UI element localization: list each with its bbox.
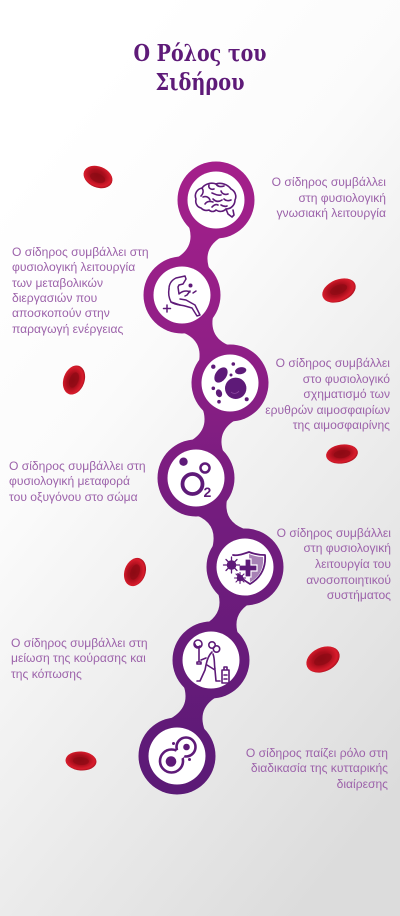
- text: fatigue: Ο σίδηρος συμβάλλει στη: [11, 636, 148, 650]
- text: red blood cells: [265, 356, 390, 432]
- icon: brain: [195, 183, 236, 217]
- text: oxygen transport: Ο σίδηρος συμβάλλει στη: [9, 459, 146, 473]
- text: energy metabolism: των μεταβολικών: [12, 276, 103, 290]
- red blood cell 5: [120, 555, 150, 589]
- text: immune system: λειτουργία του: [315, 557, 391, 571]
- text: immune system: στη φυσιολογική: [303, 541, 391, 555]
- text: energy metabolism: διεργασιών που: [12, 291, 98, 305]
- text: energy metabolism: φυσιολογική λειτουργία: [12, 260, 135, 274]
- text: immune system: Ο σίδηρος συμβάλλει: [277, 526, 391, 540]
- icon: blood cells: [211, 362, 249, 404]
- icon: oxygen O2: [179, 458, 212, 500]
- text: cell division: διαίρεσης: [337, 777, 388, 791]
- icon: immune shield: [224, 552, 265, 584]
- text: oxygen transport: φυσιολογική μεταφορά: [9, 474, 130, 488]
- text: energy metabolism: παραγωγή ενέργειας: [12, 322, 123, 336]
- text: cell division: Ο σίδηρος παίζει ρόλο στη: [246, 746, 388, 760]
- text: oxygen transport: [9, 459, 146, 504]
- text: cognitive function: [272, 175, 386, 220]
- text: energy metabolism: Ο σίδηρος συμβάλλει στη: [12, 245, 149, 259]
- title: Σιδήρου: [156, 69, 245, 96]
- red blood cell 3: [59, 362, 89, 398]
- title: [134, 40, 267, 96]
- text: cognitive function: Ο σίδηρος συμβάλλει: [272, 175, 386, 189]
- icon: cell division: [160, 738, 196, 772]
- icon: flexed arm: [164, 276, 200, 316]
- text: immune system: ανοσοποιητικού: [306, 573, 391, 587]
- text: fatigue: [11, 636, 148, 681]
- text: cell division: διαδικασία της κυτταρικής: [251, 761, 388, 775]
- text: red blood cells: Ο σίδηρος συμβάλλει: [276, 356, 390, 370]
- text: cognitive function: γνωσιακή λειτουργία: [276, 206, 386, 220]
- text: energy metabolism: αποσκοπούν στην: [12, 306, 110, 320]
- text: red blood cells: ερυθρών αιμοσφαιρίων: [265, 403, 390, 417]
- text: cognitive function: στη φυσιολογική: [298, 191, 386, 205]
- text: cell division: [246, 746, 388, 791]
- text: immune system: [277, 526, 391, 602]
- text: oxygen transport: του οξυγόνου στο σώμα: [9, 490, 138, 504]
- text: energy metabolism: [12, 245, 149, 336]
- text: red blood cells: της αιμοσφαιρίνης: [293, 418, 390, 432]
- red blood cell 6: [302, 641, 344, 678]
- text: red blood cells: στο φυσιολογικό: [303, 372, 390, 386]
- icon: oxygen O2: 2: [204, 484, 212, 500]
- text: fatigue: μείωση της κούρασης και: [11, 651, 146, 665]
- red blood cell 4: [325, 442, 359, 466]
- icon: tired person: [194, 640, 229, 683]
- red blood cell 2: [319, 274, 359, 307]
- title: Ο Ρόλος του: [134, 40, 267, 67]
- text: red blood cells: σχηματισμό των: [303, 387, 390, 401]
- chain of linked circles: [138, 162, 284, 794]
- text: fatigue: της κόπωσης: [11, 667, 82, 681]
- red blood cell 1: [80, 162, 116, 192]
- text: immune system: συστήματος: [327, 588, 391, 602]
- red blood cell 7: [65, 750, 97, 772]
